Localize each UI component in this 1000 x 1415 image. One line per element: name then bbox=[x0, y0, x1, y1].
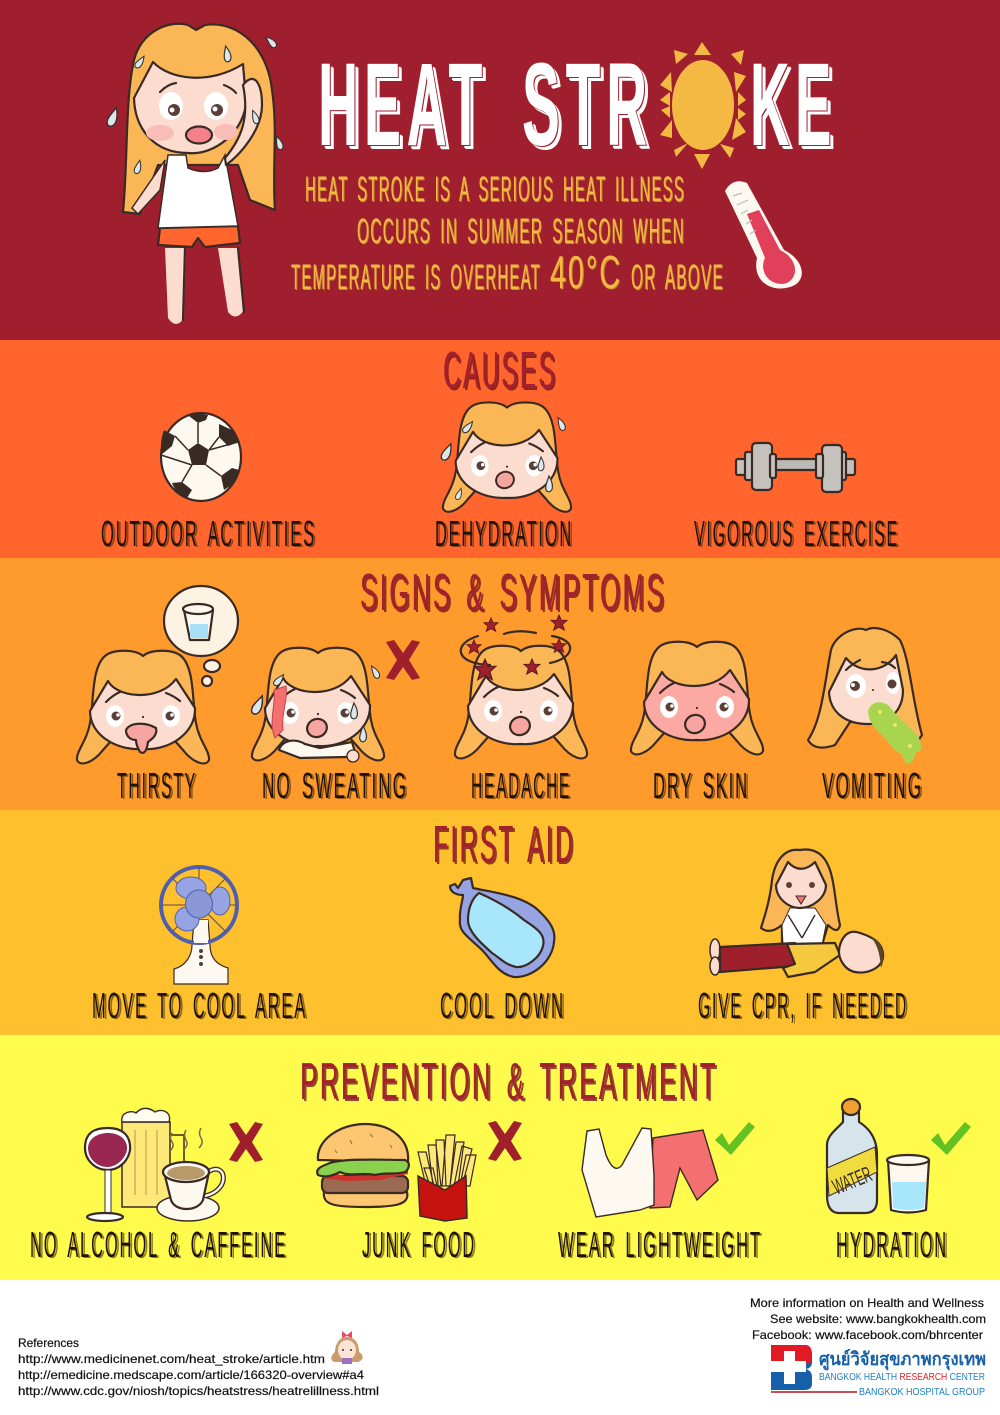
icon: red cross bbox=[488, 1121, 522, 1161]
more information: Facebook: www.facebook.com/bhrcenter bbox=[752, 1328, 983, 1342]
icon: glass of water bbox=[887, 1155, 929, 1212]
references bbox=[18, 1336, 379, 1398]
logo: Bangkok Health Research Center: BANGKOK HOSPITAL GROUP bbox=[859, 1387, 985, 1398]
panel: prevention and treatment: WEAR LIGHTWEIGHT bbox=[558, 1224, 762, 1265]
references: http://www.medicinenet.com/heat_stroke/article.htm bbox=[18, 1352, 325, 1366]
icon: burger bbox=[317, 1124, 409, 1207]
more information: More information on Health and Wellness bbox=[750, 1296, 984, 1310]
panel: header: OR ABOVE bbox=[631, 258, 724, 297]
icon: headache girl bbox=[455, 615, 587, 758]
icon: ice pack bbox=[450, 878, 554, 977]
icon: soccer ball bbox=[161, 413, 241, 501]
panel: signs and symptoms: THIRSTY bbox=[117, 765, 197, 806]
icon: dehydrated girl bbox=[440, 402, 571, 512]
panel: first aid: FIRST AID bbox=[433, 816, 575, 874]
panel: signs and symptoms: NO SWEATING bbox=[262, 765, 408, 806]
icon: thermometer bbox=[725, 181, 802, 288]
logo: Bangkok Health Research Center: ศูนย์วิจัยสุขภาพกรุงเทพ bbox=[819, 1348, 986, 1371]
title: HEAT bbox=[318, 39, 488, 171]
panel: prevention and treatment: NO ALCOHOL & CAFFEINE bbox=[30, 1224, 287, 1265]
panel: first aid: MOVE TO COOL AREA bbox=[92, 985, 307, 1026]
icon: red cross bbox=[229, 1122, 263, 1162]
icon: electric fan bbox=[161, 867, 237, 984]
panel: causes bbox=[0, 340, 1000, 558]
more information bbox=[750, 1296, 986, 1342]
panel: causes: CAUSES bbox=[443, 342, 557, 400]
icon: green check bbox=[715, 1122, 755, 1155]
references: References bbox=[18, 1336, 79, 1350]
panel: signs and symptoms: HEADACHE bbox=[471, 765, 571, 806]
icon: vomiting girl bbox=[808, 628, 922, 764]
icon: dry skin girl bbox=[631, 642, 763, 754]
panel: prevention and treatment: JUNK FOOD bbox=[362, 1224, 476, 1265]
icon: coffee cup bbox=[157, 1128, 223, 1221]
panel: signs and symptoms: DRY SKIN bbox=[653, 765, 749, 806]
logo: Bangkok Health Research Center bbox=[771, 1345, 986, 1398]
icon: thought bubble with glass bbox=[164, 586, 238, 686]
icon: thirsty girl bbox=[77, 651, 209, 763]
panel: signs and symptoms: SIGNS & SYMPTOMS bbox=[360, 564, 666, 622]
references: http://emedicine.medscape.com/article/166320-overview#a4 bbox=[18, 1368, 364, 1382]
icon: green check bbox=[931, 1122, 971, 1155]
icon: water bottle bbox=[827, 1099, 877, 1213]
panel: header bbox=[0, 0, 1000, 340]
icon: french fries bbox=[418, 1135, 476, 1221]
panel: causes: DEHYDRATION bbox=[435, 513, 573, 554]
icon: sun bbox=[660, 42, 746, 169]
icon: beer mug bbox=[122, 1108, 184, 1207]
icon: girl giving CPR bbox=[710, 850, 884, 977]
references: http://www.cdc.gov/niosh/topics/heatstress/heatrelillness.html bbox=[18, 1384, 379, 1398]
intro text: 40°C bbox=[550, 246, 622, 298]
icon: wine glass bbox=[85, 1128, 130, 1221]
panel: prevention and treatment bbox=[0, 1035, 1000, 1280]
icon: water bottle: WATER bbox=[829, 1161, 875, 1200]
illustration: sweating girl bbox=[106, 24, 284, 324]
panel: header: KE bbox=[750, 39, 837, 171]
panel: first aid: COOL DOWN bbox=[440, 985, 565, 1026]
title: STR bbox=[522, 39, 653, 171]
panel: causes: OUTDOOR ACTIVITIES bbox=[101, 513, 316, 554]
intro text: TEMPERATURE IS OVERHEAT bbox=[291, 258, 541, 297]
icon: tank top and shorts bbox=[582, 1128, 718, 1217]
icon: red cross bbox=[386, 640, 420, 680]
panel: footer bbox=[0, 1280, 1000, 1415]
icon: small girl bbox=[331, 1331, 363, 1364]
intro text bbox=[291, 170, 724, 298]
icon: dumbbell bbox=[736, 443, 855, 492]
title bbox=[318, 39, 837, 171]
panel: signs and symptoms bbox=[0, 558, 1000, 810]
more information: See website: www.bangkokhealth.com bbox=[770, 1312, 986, 1326]
icon: no sweating girl bbox=[250, 648, 384, 762]
panel: first aid bbox=[0, 810, 1000, 1035]
logo: Bangkok Health Research Center: BANGKOK HEALTH RESEARCH CENTER bbox=[819, 1372, 985, 1383]
